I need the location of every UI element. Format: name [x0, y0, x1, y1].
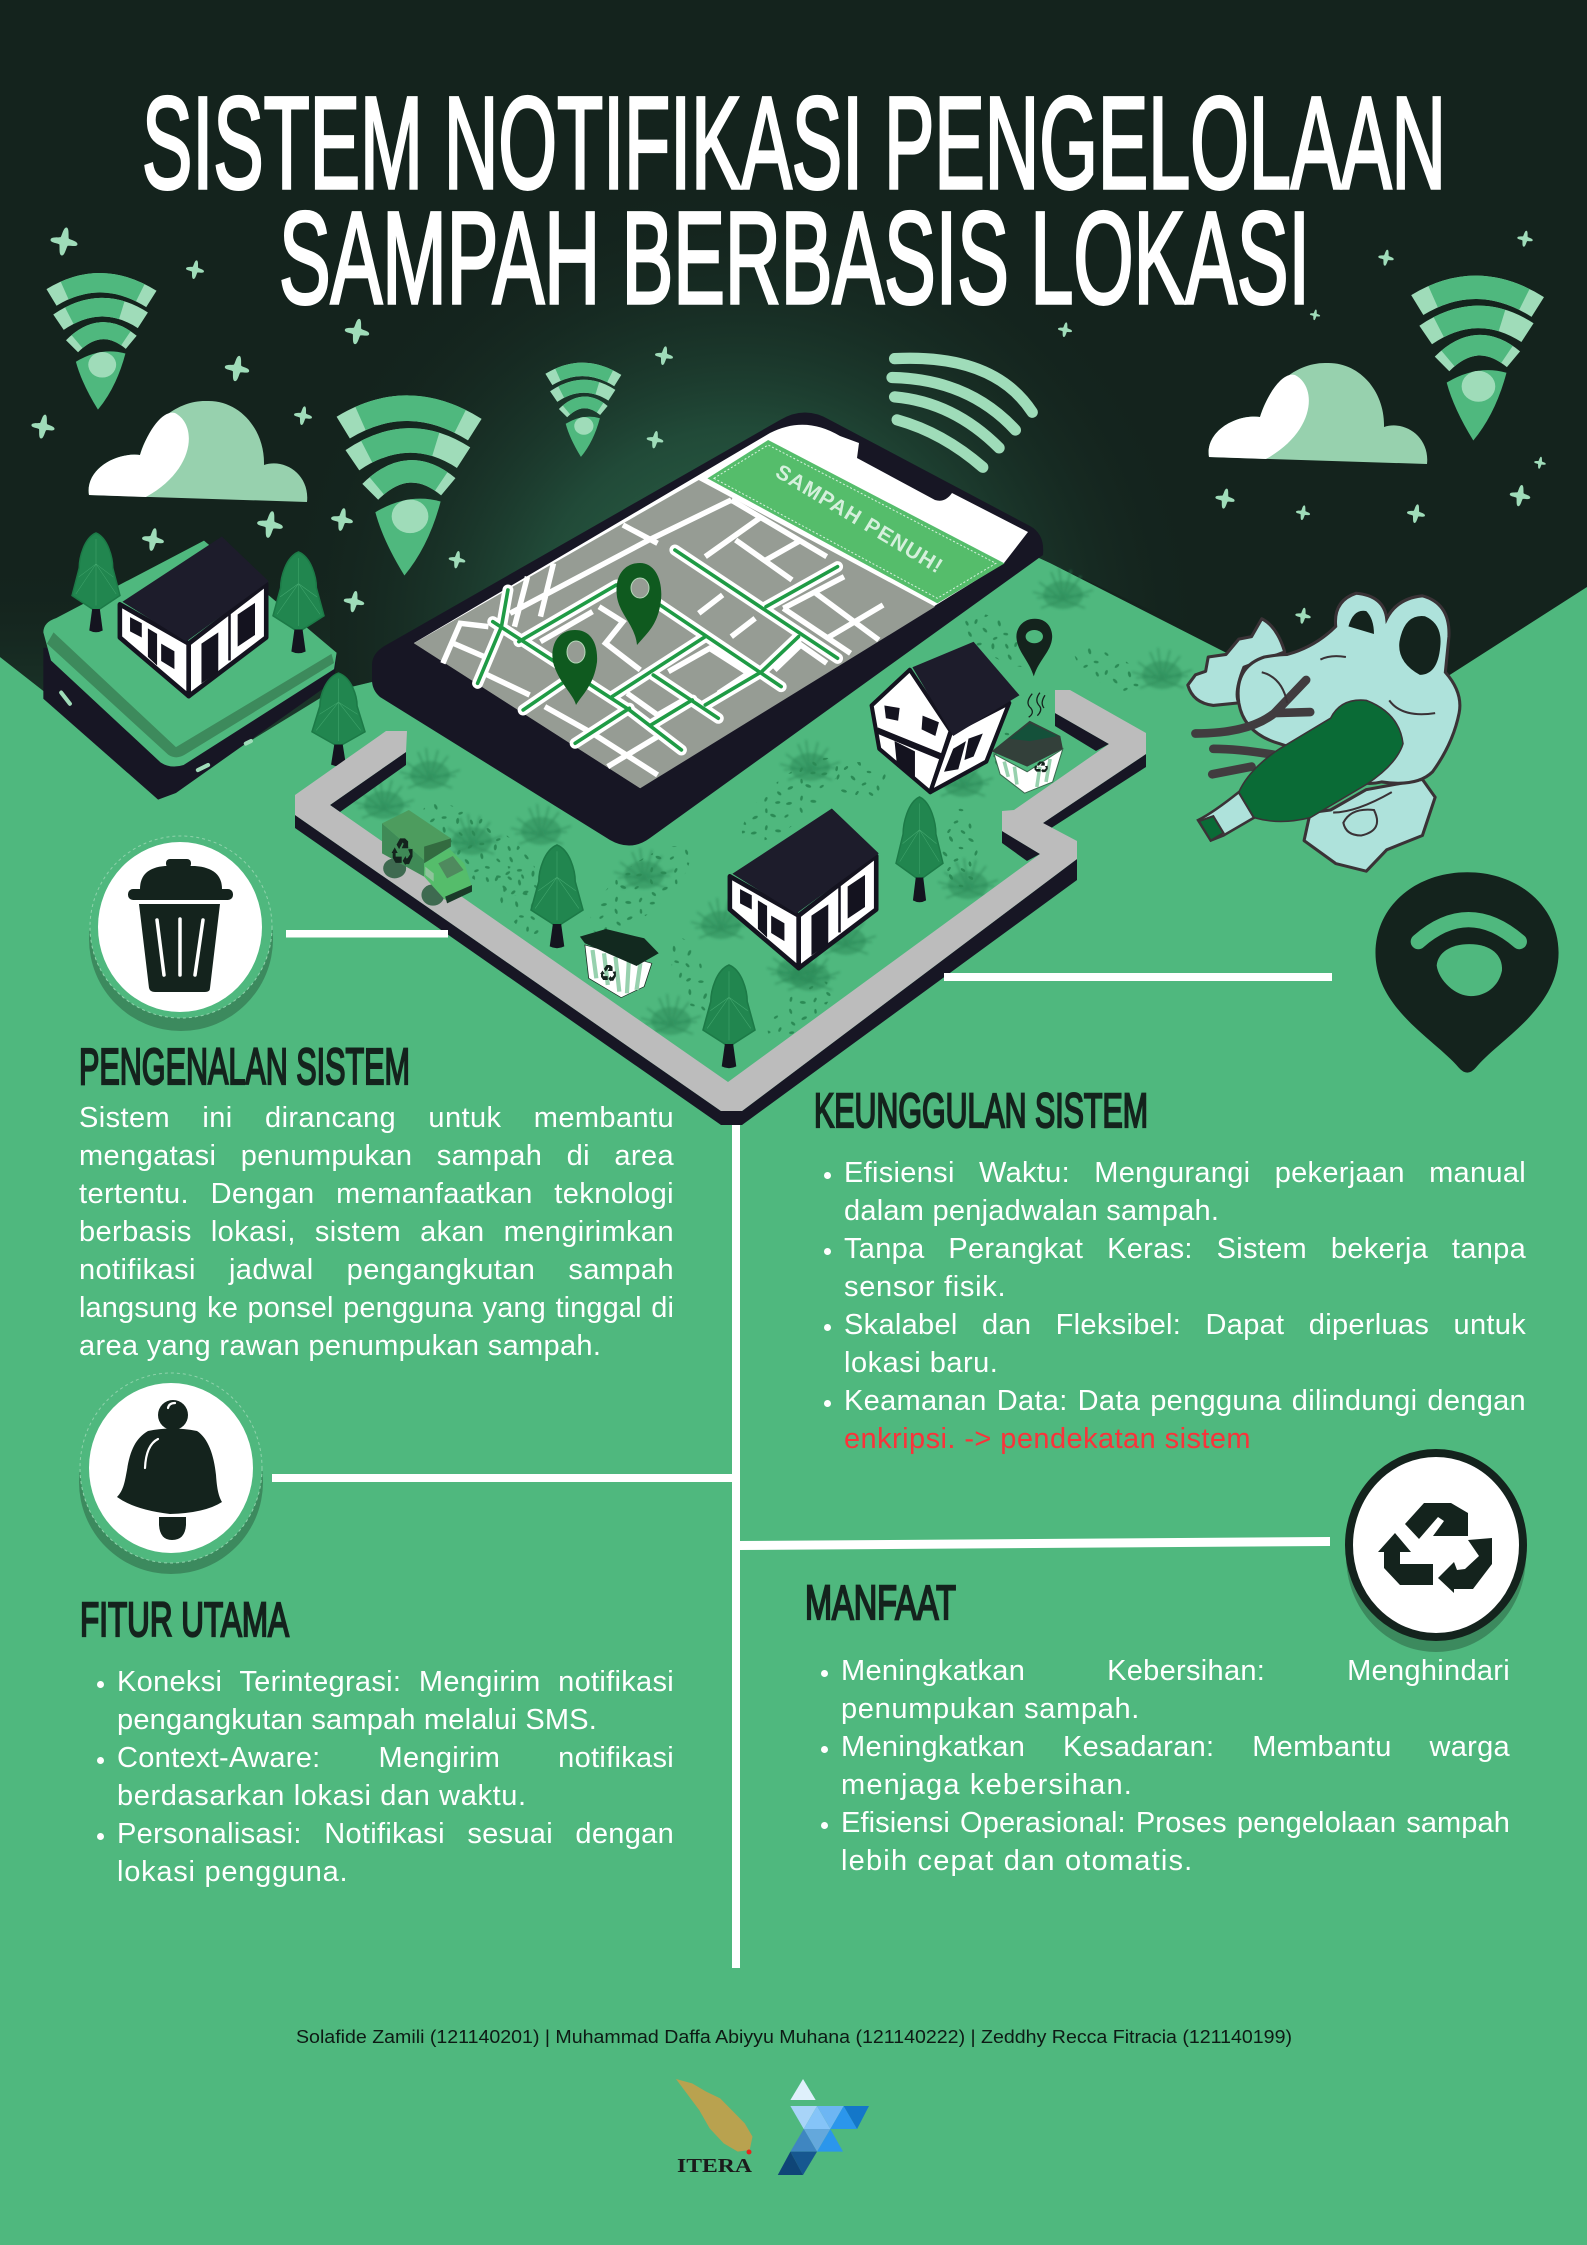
connector line: fitur	[272, 1474, 733, 1482]
tree	[312, 673, 365, 766]
bin near house	[991, 693, 1063, 793]
big location pin	[1375, 872, 1559, 1073]
map wide roads	[478, 550, 838, 750]
text: pengenalan sistem: langsung ke ponsel pengguna yang tinggal di	[79, 1292, 674, 1324]
icon: cloud left	[89, 401, 307, 502]
bag frill	[1188, 619, 1285, 705]
text: pengenalan sistem: notifikasi jadwal pengangkutan sampah	[79, 1254, 674, 1286]
bag hole	[1348, 611, 1441, 675]
text: keunggulan sistem	[824, 1157, 1526, 1455]
map pin 2	[552, 630, 597, 705]
banner	[707, 440, 1005, 603]
heading: fitur utama: FITUR UTAMA	[80, 1594, 289, 1647]
bag upper	[1238, 593, 1460, 783]
sticks	[1195, 680, 1310, 774]
phone body	[372, 412, 1043, 846]
text: keunggulan sistem: Keamanan Data: Data pengguna dilindungi dengan	[844, 1385, 1526, 1417]
banner text: SAMPAH PENUH!	[771, 460, 947, 579]
text: fitur utama: berdasarkan lokasi dan waktu.	[117, 1780, 527, 1812]
background: low left glow	[0, 560, 330, 790]
text: manfaat: penumpukan sampah.	[841, 1693, 1140, 1725]
text: pengenalan sistem: berbasis lokasi, sistem akan mengirimkan	[79, 1216, 674, 1248]
text: keunggulan sistem: Efisiensi Waktu: Mengurangi pekerjaan manual	[844, 1157, 1526, 1189]
text: pengenalan sistem: area yang rawan penumpukan sampah.	[79, 1330, 601, 1362]
tree	[531, 845, 583, 948]
text: fitur utama: Context-Aware: Mengirim notifikasi	[117, 1742, 674, 1774]
icon: wifi pin centre small	[549, 369, 618, 457]
icon: cloud right	[1209, 363, 1427, 464]
text: fitur utama: lokasi pengguna.	[117, 1856, 348, 1888]
icon: wifi pin right	[1417, 287, 1538, 441]
text: fitur utama	[97, 1666, 674, 1888]
neighbourhood ground foliage	[354, 568, 1192, 1048]
icon: signal waves above phone	[892, 358, 1032, 467]
tree	[72, 533, 120, 632]
bag lower	[1304, 779, 1435, 871]
text: pengenalan sistem	[79, 1102, 674, 1362]
text: manfaat	[821, 1655, 1510, 1877]
bin in front	[580, 929, 659, 998]
text: manfaat: Meningkatkan Kesadaran: Membantu warga	[841, 1731, 1510, 1763]
trash pile	[1188, 593, 1460, 871]
text: fitur utama: Koneksi Terintegrasi: Mengirim notifikasi	[117, 1666, 674, 1698]
heading: pengenalan sistem: PENGENALAN SISTEM	[79, 1038, 410, 1095]
route lines	[478, 550, 838, 750]
map pin 1	[617, 563, 661, 645]
connector line: vertical spine	[732, 1125, 740, 1968]
text: keunggulan sistem: dalam penjadwalan sampah.	[844, 1195, 1219, 1227]
text: fitur utama: Personalisasi: Notifikasi sesuai dengan	[117, 1818, 674, 1850]
connector line: pengenalan	[286, 930, 448, 938]
house	[120, 537, 269, 696]
recycle symbol	[1378, 1503, 1492, 1593]
icon: recycle badge	[1346, 1453, 1526, 1652]
icon: bell badge	[79, 1373, 263, 1574]
pin small dark	[1016, 619, 1052, 676]
text: keunggulan sistem: Skalabel dan Fleksibel: Dapat diperluas untuk	[844, 1309, 1526, 1341]
house centre	[730, 809, 879, 968]
logo: ITERA	[676, 2079, 753, 2177]
bell	[117, 1400, 222, 1540]
trash can	[128, 859, 233, 992]
tree	[896, 797, 943, 902]
tree	[703, 965, 755, 1068]
text: pengenalan sistem: tertentu. Dengan memanfaatkan teknologi	[79, 1178, 674, 1210]
phone	[372, 412, 1043, 846]
text: fitur utama: pengangkutan sampah melalui SMS.	[117, 1704, 597, 1736]
text: manfaat: Meningkatkan Kebersihan: Menghindari	[841, 1655, 1510, 1687]
house right	[872, 642, 1020, 792]
text: manfaat: lebih cepat dan otomatis.	[841, 1845, 1193, 1877]
text: keunggulan sistem: sensor fisik.	[844, 1271, 1006, 1303]
island base	[43, 541, 337, 800]
phone screen	[414, 425, 1028, 788]
icon: wifi pin left	[343, 408, 475, 575]
authors credit: Solafide Zamili (121140201) | Muhammad Daffa Abiyyu Muhana (121140222) | Zeddhy Recca Fitracia (121140199)	[296, 2026, 1292, 2047]
text: keunggulan sistem: Tanpa Perangkat Keras: Sistem bekerja tanpa	[844, 1233, 1526, 1265]
connector line: manfaat	[739, 1537, 1330, 1550]
text: pengenalan sistem: Sistem ini dirancang untuk membantu	[79, 1102, 674, 1134]
icon: sparkles	[29, 225, 1547, 625]
title	[142, 69, 1446, 331]
logo: F triangles	[778, 2079, 869, 2175]
text: keunggulan sistem: lokasi baru.	[844, 1347, 998, 1379]
text: manfaat: menjaga kebersihan.	[841, 1769, 1133, 1801]
text: manfaat: Efisiensi Operasional: Proses pengelolaan sampah	[841, 1807, 1510, 1839]
background: dark sky	[0, 0, 1587, 790]
island: left with house	[43, 533, 365, 800]
connector line: keunggulan	[944, 973, 1332, 981]
truck	[382, 810, 472, 906]
map	[414, 440, 1005, 788]
background: glow behind phone	[200, 200, 1300, 736]
icon: wifi pin far left	[52, 283, 151, 410]
text: keunggulan sistem: enkripsi. -> pendekatan sistem	[844, 1423, 1251, 1455]
logo: ITERA: ITERA	[677, 2155, 753, 2177]
map roads	[443, 500, 883, 775]
bottle	[1198, 792, 1254, 841]
icon: trash can badge	[89, 836, 273, 1031]
tree	[273, 552, 324, 653]
heading: manfaat: MANFAAT	[805, 1577, 956, 1630]
heading: keunggulan sistem: KEUNGGULAN SISTEM	[814, 1085, 1148, 1138]
text: pengenalan sistem: mengatasi penumpukan sampah di area	[79, 1140, 674, 1172]
road wall around neighbourhood	[295, 690, 1146, 1125]
